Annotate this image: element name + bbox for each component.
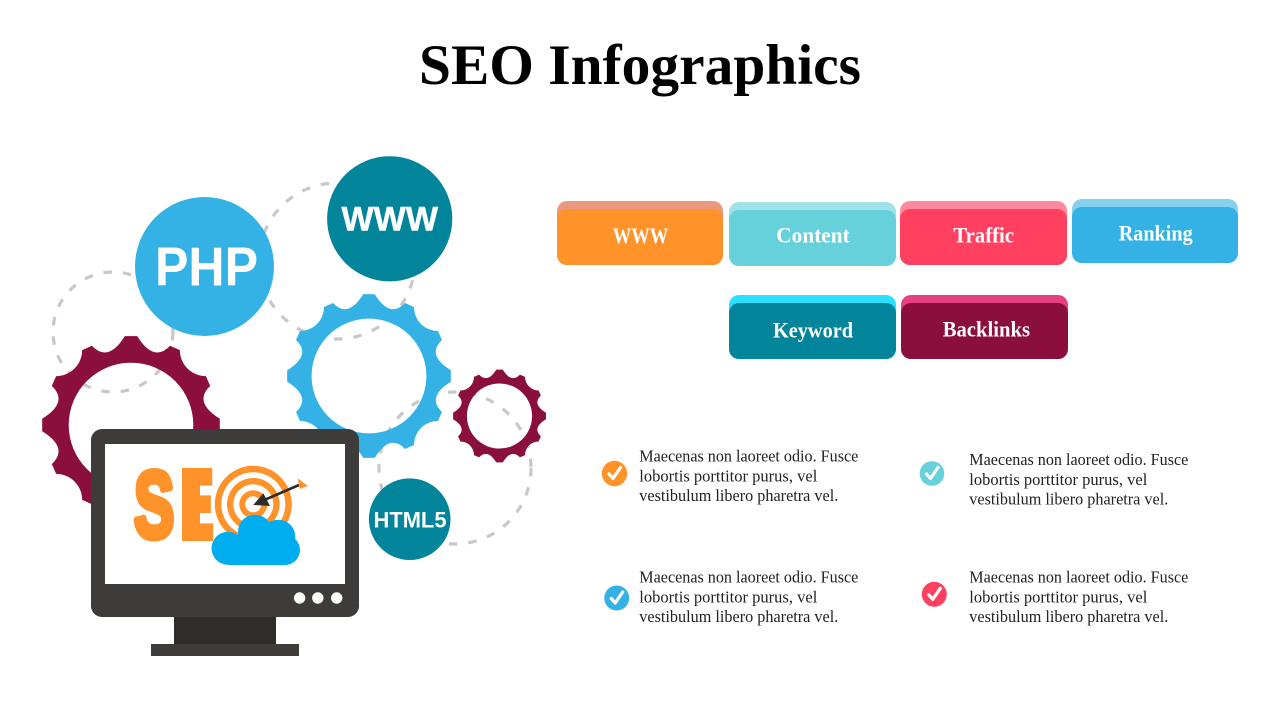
item: orange check: lobortis porttitor purus, vel (639, 466, 818, 486)
tab: Backlinks (901, 295, 1068, 359)
tab: WWW: WWW (613, 223, 668, 248)
panel: category tabs (557, 199, 1238, 359)
dashed connector: PHP loop (53, 272, 173, 392)
panel: checklist (602, 447, 1188, 626)
tab: Traffic: Traffic (953, 223, 1014, 248)
item: orange check: vestibulum libero pharetra vel. (639, 486, 838, 505)
SEO logo on screen: E (182, 452, 213, 558)
tab: Backlinks: Backlinks (943, 317, 1030, 342)
item: red check: vestibulum libero pharetra vel. (969, 607, 1168, 626)
badge: WWW (327, 156, 452, 281)
tab: Keyword: Keyword (773, 318, 853, 343)
dashed connector: HTML5 loop (379, 392, 531, 544)
tab: Content (729, 202, 896, 266)
SEO logo on screen: S (134, 452, 174, 557)
icon: blue gear (287, 294, 451, 458)
item: blue check: Maecenas non laoreet odio. Fusce (639, 568, 858, 587)
item: orange check (602, 447, 858, 505)
badge: PHP (135, 197, 274, 336)
tab: Keyword (729, 295, 896, 359)
tab: Ranking: Ranking (1119, 221, 1193, 246)
icon: large maroon gear (42, 336, 220, 514)
item: teal check: Maecenas non laoreet odio. Fusce (969, 450, 1188, 469)
item: blue check: vestibulum libero pharetra vel. (639, 607, 838, 626)
tab: Ranking (1072, 199, 1238, 263)
item: red check (922, 568, 1188, 626)
badge: PHP: PHP (155, 236, 258, 298)
SEO logo on screen (134, 452, 308, 565)
icon: monitor (91, 429, 359, 656)
item: teal check: lobortis porttitor purus, vel (969, 470, 1148, 489)
dashed connector: WWW loop (259, 183, 415, 339)
badge: HTML5: HTML5 (374, 508, 446, 533)
item: teal check: vestibulum libero pharetra vel. (969, 489, 1168, 508)
item: blue check: lobortis porttitor purus, vel (639, 588, 818, 606)
item: teal check (920, 450, 1188, 508)
panel: SEO gear illustration (42, 156, 546, 656)
icon: small maroon gear (453, 370, 546, 462)
tab: Content: Content (776, 223, 850, 248)
title: SEO Infographics (419, 34, 861, 97)
item: red check: lobortis porttitor purus, vel (969, 588, 1148, 606)
item: orange check: Maecenas non laoreet odio. Fusce (639, 447, 858, 466)
badge: HTML5 (369, 478, 451, 560)
badge: WWW: WWW (342, 201, 438, 239)
tab: Traffic (900, 201, 1067, 265)
tab: WWW (557, 201, 723, 265)
item: red check: Maecenas non laoreet odio. Fusce (969, 568, 1188, 587)
item: blue check (604, 568, 858, 626)
